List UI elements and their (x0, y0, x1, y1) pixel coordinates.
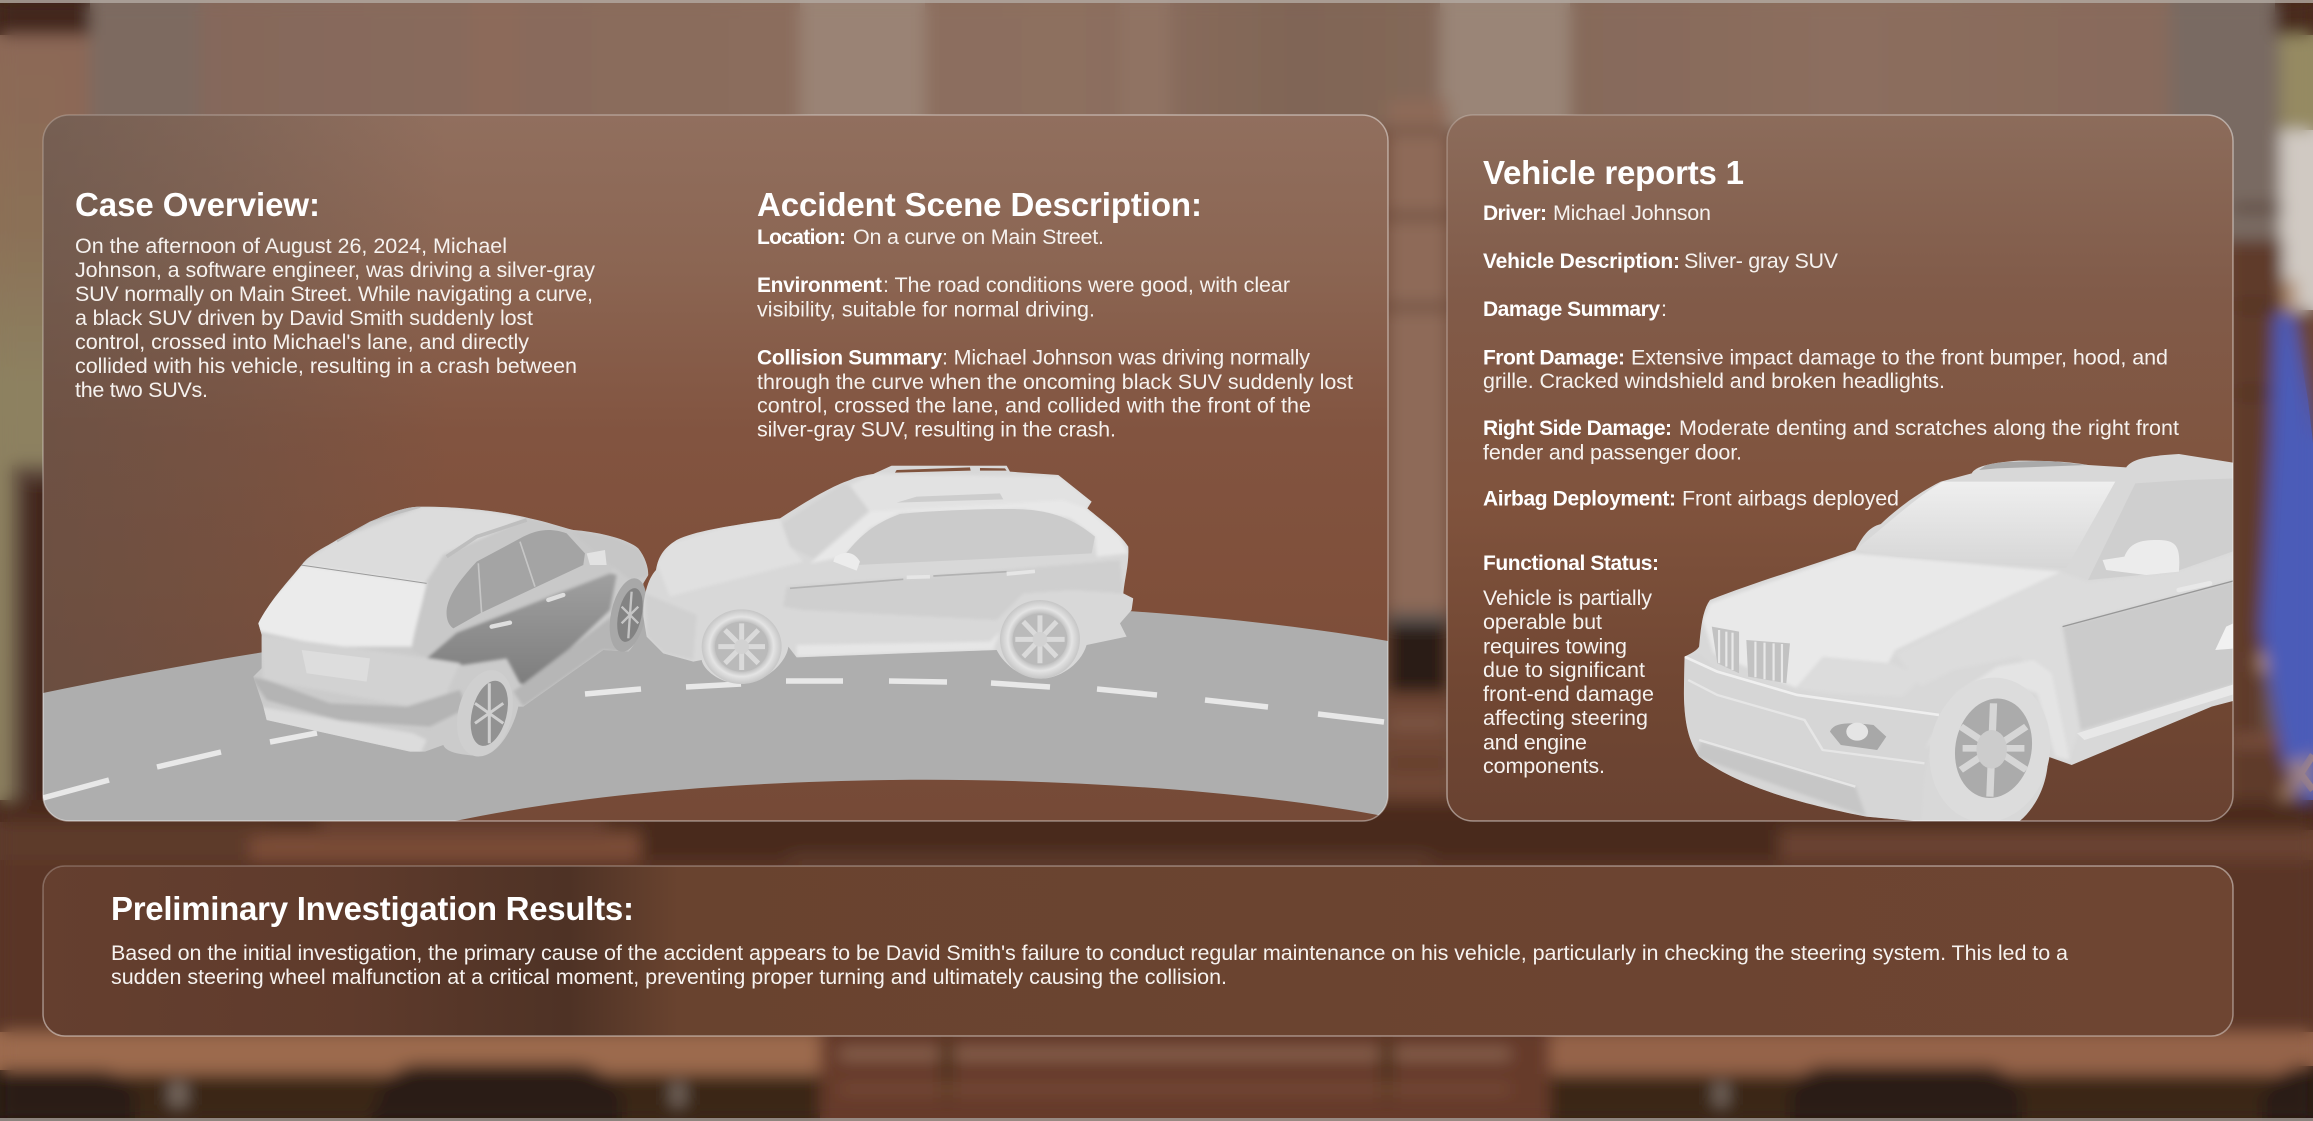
illustration: damaged silver-gray SUV front view (1677, 450, 2244, 830)
text: functional status: front-end damage (1483, 682, 1654, 706)
text: vehicle report details: Front airbags deployed (1682, 486, 1899, 510)
heading: preliminary investigation results: Preliminary Investigation Results: (111, 890, 634, 927)
text: accident scene details: control, crossed the lane, and collided with the front of the (757, 394, 1311, 418)
rear wheel (448, 664, 521, 762)
text: vehicle report details: Driver: (1483, 202, 1547, 225)
text: accident scene details: through the curve when the oncoming black SUV suddenly lost (757, 370, 1353, 394)
text: accident scene details: visibility, suitable for normal driving. (757, 298, 1095, 322)
heading: vehicle reports 1: Vehicle reports 1 (1483, 154, 1744, 191)
text: investigation findings (111, 941, 2068, 989)
panel: case overview and accident scene (43, 115, 1388, 821)
text: vehicle report details: Damage Summary (1483, 298, 1660, 321)
panel: vehicle report (1447, 115, 2244, 830)
text: vehicle report details: grille. Cracked windshield and broken headlights. (1483, 369, 1945, 393)
text: accident scene details: Environment (757, 274, 882, 297)
text: case overview: SUV normally on Main Street. While navigating a curve, (75, 282, 593, 306)
text: functional status: Vehicle is partially (1483, 586, 1652, 610)
text: case overview: On the afternoon of August 26, 2024, Michael (75, 234, 507, 258)
text: accident scene details: : The road conditions were good, with clear (883, 273, 1290, 297)
text: vehicle report details (1483, 201, 2179, 510)
text: functional status: components. (1483, 754, 1605, 778)
text: case overview: the two SUVs. (75, 378, 208, 402)
text: vehicle report details: Sliver- gray SUV (1684, 249, 1839, 273)
panel: preliminary investigation results (43, 866, 2233, 1036)
front wheel (604, 575, 653, 655)
text: functional status (1483, 552, 1659, 778)
rear wheel (1000, 600, 1080, 679)
text: vehicle report details: Michael Johnson (1553, 201, 1711, 225)
text: functional status: affecting steering (1483, 706, 1648, 730)
text: vehicle report details: Airbag Deployment: (1483, 488, 1676, 510)
text: vehicle report details: Vehicle Description: (1483, 250, 1680, 273)
text: accident scene details: : Michael Johnson was driving normally (942, 346, 1310, 370)
text: vehicle report details: fender and passenger door. (1483, 440, 1742, 464)
front wheel (702, 609, 782, 684)
text: accident scene details: On a curve on Main Street. (853, 225, 1104, 249)
text: case overview (75, 234, 595, 402)
illustration: silver-gray SUV side view (637, 460, 1140, 690)
text: accident scene details: Collision Summary (757, 346, 942, 370)
text: vehicle report details: Extensive impact damage to the front bumper, hood, and (1631, 346, 2168, 370)
text: case overview: control, crossed into Michael's lane, and directly (75, 330, 529, 354)
heading: case overview: Case Overview: (75, 186, 320, 223)
text: accident scene details: Location: (757, 226, 846, 249)
text: vehicle report details: : (1661, 297, 1667, 321)
text: case overview: collided with his vehicle, resulting in a crash between (75, 354, 577, 378)
text: case overview: Johnson, a software engineer, was driving a silver-gray (75, 258, 595, 282)
front wheel (1955, 698, 2050, 798)
text: functional status: operable but (1483, 610, 1602, 634)
text: vehicle report details: Right Side Damage: (1483, 417, 1672, 440)
text: case overview: a black SUV driven by David Smith suddenly lost (75, 306, 533, 330)
text: functional status: and engine (1483, 730, 1587, 754)
text: investigation findings: Based on the initial investigation, the primary cause of the accident appears to be David Smith's failure to conduct regular maintenance on his vehicle, particularly in checking the steering system. This led to a (111, 941, 2068, 965)
text: functional status: requires towing (1483, 634, 1627, 658)
text: functional status: Functional Status: (1483, 552, 1659, 575)
panel borders (43, 115, 2233, 1036)
text: investigation findings: sudden steering wheel malfunction at a critical moment, preventing proper turning and ultimately causing the collision. (111, 965, 1227, 989)
illustration: black SUV from behind (247, 500, 657, 762)
text: vehicle report details: Front Damage: (1483, 346, 1625, 370)
text: accident scene details: silver-gray SUV, resulting in the crash. (757, 418, 1116, 442)
text: accident scene details (757, 225, 1353, 442)
text: vehicle report details: Moderate denting and scratches along the right front (1679, 416, 2179, 440)
road with lane markings (43, 603, 1388, 821)
text: functional status: due to significant (1483, 658, 1645, 682)
heading: accident scene description: Accident Scene Description: (757, 186, 1202, 223)
